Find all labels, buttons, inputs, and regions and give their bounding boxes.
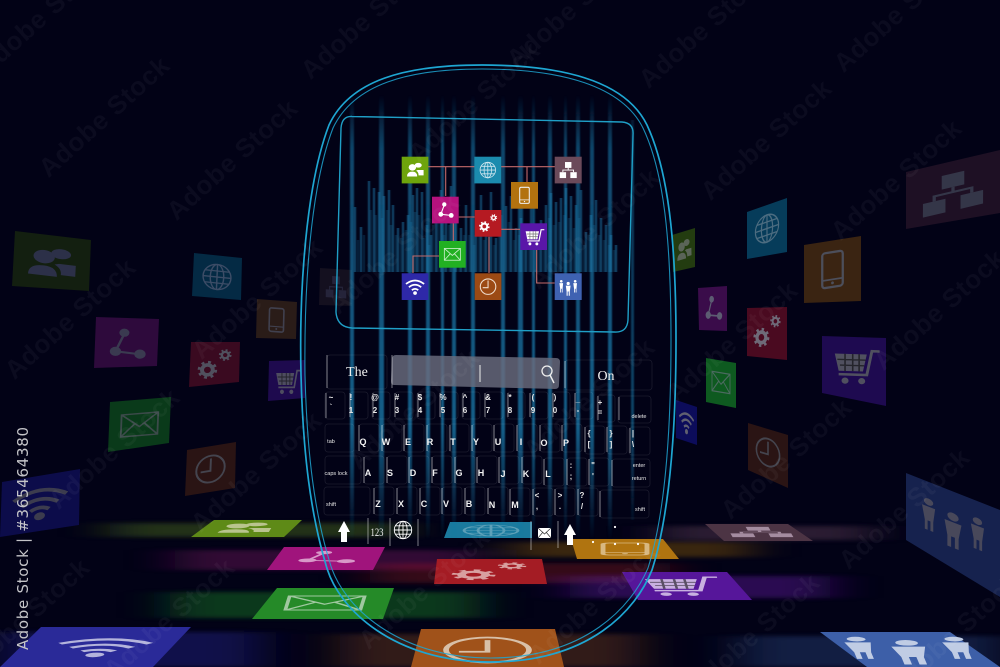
app icon: clock: [475, 273, 501, 300]
letter row QWERTY: [327, 429, 635, 449]
stock watermarks: Adobe Stock: [714, 392, 858, 525]
letter row QWERTY: P: [563, 438, 569, 448]
letter row QWERTY: [: [588, 440, 591, 449]
vertical data beams: [350, 95, 634, 540]
letter row QWERTY: U: [495, 437, 501, 447]
left floating icons: [0, 231, 352, 537]
letter row QWERTY: Q: [359, 437, 367, 447]
letter row QWERTY: tab: [327, 439, 335, 445]
number row labels: $: [418, 393, 423, 402]
stock watermarks: Adobe Stock: [342, 342, 486, 475]
keyboard: [324, 355, 652, 550]
app icon: wifi: [402, 273, 428, 300]
search bar: [391, 355, 560, 389]
letter row ZXCV: <: [535, 491, 540, 500]
letter row ZXCV: shift: [326, 502, 337, 508]
right floating icons: [672, 150, 1000, 597]
stock watermarks: Adobe Stock: [824, 113, 968, 246]
stock watermarks: Adobe Stock: [185, 232, 329, 365]
app icon: users: [402, 157, 428, 183]
number row labels: 9: [531, 406, 536, 415]
letter row ZXCV: X: [398, 499, 404, 509]
icon: gears: [747, 307, 787, 360]
letter row ASDF: ": [591, 461, 595, 470]
number row labels: #: [395, 393, 400, 402]
stock watermarks: Adobe Stock: [832, 442, 976, 575]
letter row ASDF: A: [365, 468, 372, 478]
icon: share: [698, 286, 727, 331]
floor tile: gears: [434, 559, 547, 584]
stock watermarks: Adobe Stock: [517, 332, 661, 465]
floor tile: globe: [444, 522, 532, 538]
stock watermarks: Adobe Stock: [32, 50, 176, 183]
icon: cart: [822, 336, 886, 406]
letter row ASDF: J: [500, 469, 506, 479]
floor tile: share: [267, 547, 385, 570]
bottom row: 123: 123: [370, 525, 384, 539]
icon: users: [672, 228, 695, 272]
letter row ZXCV: B: [466, 499, 473, 509]
letter row ASDF: enter: [633, 463, 645, 469]
icon: clock: [748, 423, 788, 488]
letter row QWERTY: O: [540, 438, 548, 448]
letter row ASDF: K: [523, 469, 530, 479]
app icon: org: [555, 157, 582, 183]
suggestion: The: The: [346, 365, 368, 380]
letter row ASDF: caps lock: [325, 471, 348, 477]
app icon: share: [432, 197, 459, 223]
letter row QWERTY: ]: [610, 440, 613, 449]
number row labels: 6: [463, 406, 468, 415]
letter row ZXCV: /: [581, 502, 584, 511]
letter row ZXCV: [326, 491, 646, 513]
stock watermarks: Adobe Stock: [694, 73, 838, 206]
letter row QWERTY: {: [587, 429, 591, 438]
number row labels: !: [350, 393, 352, 402]
number row labels: `: [330, 403, 333, 412]
stock watermarks: Adobe Stock: [0, 252, 142, 385]
letter row QWERTY: }: [609, 429, 613, 438]
icon: users: [12, 231, 91, 291]
screen frame: [336, 116, 633, 332]
letter row ZXCV: M: [511, 500, 519, 510]
stock watermarks: Adobe Stock: [402, 35, 546, 168]
letter row ASDF: H: [478, 468, 484, 478]
number row labels: ~: [329, 393, 334, 402]
icon: phone: [256, 299, 297, 339]
number row labels: %: [439, 393, 447, 402]
number row labels: _: [575, 395, 581, 404]
letter row ASDF: return: [632, 476, 646, 482]
number row labels: 4: [418, 406, 423, 415]
letter row QWERTY: |: [632, 429, 634, 438]
letter row ASDF: F: [432, 468, 438, 478]
bottom row: mail: [538, 528, 551, 538]
number row labels: @: [371, 393, 379, 402]
stock watermarks: Adobe Stock: [160, 93, 304, 226]
suggestion: On: On: [597, 369, 615, 384]
floor tile: users: [191, 520, 302, 537]
icon: wifi: [0, 469, 80, 537]
letter row ZXCV: V: [443, 499, 449, 509]
letter row QWERTY: W: [382, 437, 391, 447]
stock watermarks: Adobe Stock: [322, 187, 466, 320]
key outlines: [324, 355, 652, 518]
letter row QWERTY: I: [520, 437, 522, 447]
letter row ASDF: ;: [570, 472, 572, 481]
floor tile: org: [705, 524, 813, 541]
key highlights: [326, 355, 630, 550]
letter row ASDF: ': [592, 472, 594, 481]
floor tile: phone: [571, 539, 679, 559]
number row labels: (: [532, 393, 535, 402]
letter row ASDF: S: [387, 468, 393, 478]
number row labels: ^: [463, 393, 468, 402]
stock watermarks: Adobe Stock: [352, 522, 496, 655]
phone outline: [301, 65, 676, 662]
stock watermarks: Adobe Stock: [184, 405, 328, 538]
bottom row: globe: [394, 521, 412, 539]
floor tile: people: [820, 632, 1000, 667]
app network connectors: [413, 167, 555, 283]
letter row QWERTY: Y: [473, 437, 479, 447]
letter row ZXCV: >: [558, 491, 563, 500]
number row labels: 8: [508, 406, 513, 415]
app icon: cart: [520, 223, 547, 250]
letter row ZXCV: .: [559, 502, 561, 511]
stock watermarks: Adobe Stock: [42, 382, 186, 515]
letter row ASDF: L: [545, 469, 551, 479]
letter row QWERTY: T: [450, 437, 456, 447]
letter row ASDF: D: [410, 468, 417, 478]
floor tile: mail: [252, 588, 394, 619]
icon: cart: [268, 360, 305, 401]
app icon: mail: [439, 241, 466, 268]
floor tile motion streaks: [0, 523, 1000, 667]
icon: org: [319, 268, 352, 306]
letter row ASDF: [325, 461, 646, 482]
app icon: phone: [511, 182, 538, 209]
stock watermarks: Adobe Stock: [660, 275, 804, 408]
icon: mail: [108, 397, 171, 452]
number row labels: ): [554, 393, 557, 402]
floor tile: wifi: [0, 627, 191, 667]
bottom row: dots: [592, 526, 639, 545]
icon: globe: [747, 198, 787, 259]
number row labels: *: [508, 393, 512, 402]
floor tile: clock: [411, 629, 564, 667]
number row labels: -: [577, 406, 580, 415]
floor reflection tiles: [0, 520, 1000, 667]
letter row ZXCV: ,: [536, 502, 538, 511]
icon: clock: [185, 442, 236, 496]
icon: wifi: [676, 400, 697, 445]
icon: mail: [706, 358, 736, 408]
letter row QWERTY: R: [427, 437, 434, 447]
letter row ZXCV: ?: [580, 491, 585, 500]
number row labels: [329, 393, 646, 420]
stock watermarks: Adobe Stock: [522, 162, 666, 295]
icon: org: [906, 150, 1000, 229]
floor tile: cart: [622, 572, 752, 600]
stock id vertical label: Adobe Stock | #365464380: [14, 427, 32, 650]
bottom row: up arrow right: [564, 524, 576, 545]
icon: globe: [192, 253, 242, 300]
letter row ZXCV: Z: [375, 499, 381, 509]
icon: share: [94, 317, 159, 368]
number row labels: 7: [486, 406, 491, 415]
letter row ASDF: G: [455, 468, 463, 478]
letter row ZXCV: C: [421, 499, 428, 509]
app icon: globe: [474, 157, 501, 183]
number row labels: 0: [553, 406, 558, 415]
number row labels: 2: [373, 406, 378, 415]
icon: people: [906, 473, 1000, 597]
bottom row: up arrow: [338, 521, 350, 542]
letter row QWERTY: E: [405, 437, 411, 447]
number row labels: delete: [632, 414, 646, 420]
number row labels: =: [598, 408, 603, 417]
icon: phone: [804, 236, 861, 303]
app icon: gears: [475, 210, 501, 237]
letter row ASDF: :: [570, 461, 572, 470]
letter row ZXCV: shift: [635, 507, 646, 513]
number row labels: &: [485, 393, 491, 402]
app icon: people: [555, 273, 582, 300]
number row labels: 5: [441, 406, 446, 415]
app network icons: [402, 157, 582, 300]
icon: gears: [189, 342, 240, 387]
number row labels: +: [598, 398, 603, 407]
letter row ZXCV: N: [489, 500, 495, 510]
number row labels: 1: [349, 406, 354, 415]
letter row QWERTY: \: [632, 440, 635, 449]
data spectrum bars: [355, 181, 616, 272]
number row labels: 3: [395, 406, 400, 415]
stock watermarks: Adobe Stock: [522, 537, 666, 667]
